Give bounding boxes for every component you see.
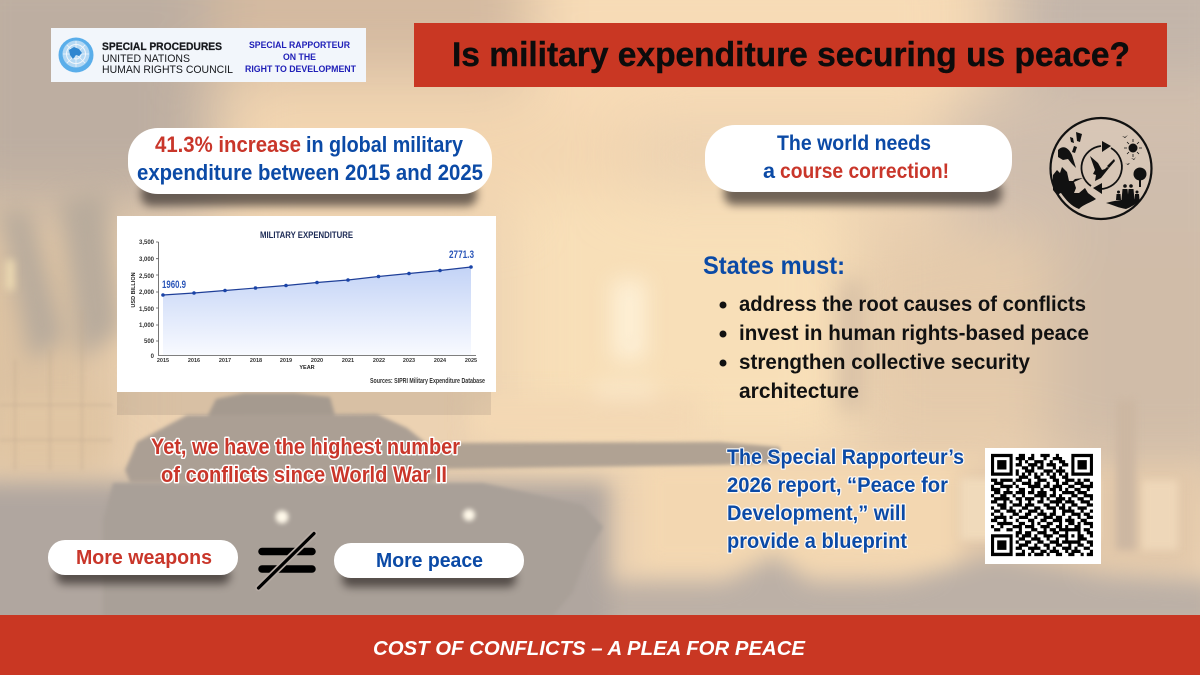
logo text: Special Procedures: HUMAN RIGHTS COUNCIL: [102, 64, 233, 76]
y-axis title: USD BILLION: [131, 272, 137, 308]
text block: 2026 report: [727, 446, 964, 553]
x-axis labels: 2024: [434, 358, 447, 364]
y-axis labels: 3,000: [139, 257, 155, 263]
callout: 41.3% increase: [128, 128, 492, 206]
x-axis labels: 2023: [403, 358, 415, 364]
footer banner: [0, 615, 1200, 675]
x-axis title: YEAR: [299, 365, 315, 371]
list: state actions: address the root causes of conflicts: [739, 293, 1086, 316]
callout: course correction: a: [763, 160, 775, 183]
logo text: Special Rapporteur: [245, 40, 356, 74]
callout: course correction: The world needs: [777, 132, 931, 155]
callout: 41.3% increase: 41.3% increase: [155, 132, 301, 157]
text block: 2026 report: Development,” will: [727, 502, 906, 525]
x-axis labels: 2017: [219, 358, 231, 364]
chart axes: [156, 242, 476, 356]
x-axis labels: 2018: [250, 358, 262, 364]
bombs, smoke, ruins and tank: [1053, 132, 1096, 209]
callout: 41.3% increase: in global military: [306, 132, 464, 157]
x-axis labels: [157, 358, 477, 364]
logo text: Special Procedures: SPECIAL PROCEDURES: [102, 41, 222, 53]
x-axis labels: 2016: [188, 358, 200, 364]
title banner: Is military expenditure securing us peace?: [452, 36, 1130, 74]
chart area fill: [163, 267, 471, 355]
pill: more weapons: [48, 540, 238, 584]
icon: UN emblem: [58, 38, 94, 72]
dove: [1090, 156, 1115, 181]
header logo panel: [51, 28, 366, 82]
QR code: [985, 448, 1101, 564]
statement: highest number of conflicts: [151, 434, 460, 487]
list: state actions: [720, 293, 1089, 403]
value label 2771.3: 2771.3: [449, 249, 474, 261]
value label 1960.9: 1960.9: [162, 279, 186, 291]
x-axis labels: 2022: [373, 358, 385, 364]
y-axis labels: 3,500: [139, 240, 155, 246]
list: state actions: invest in human rights-based peace: [739, 322, 1089, 345]
x-axis labels: 2025: [465, 358, 477, 364]
y-axis labels: 500: [144, 339, 155, 345]
y-axis labels: 2,500: [139, 274, 155, 280]
callout: course correction: course correction!: [780, 160, 949, 183]
line chart: military expenditure: MILITARY EXPENDITURE: [260, 230, 353, 240]
y-axis labels: 1,500: [139, 307, 155, 313]
icon: not equal sign: [258, 534, 314, 588]
y-axis labels: 1,000: [139, 323, 155, 329]
statement: highest number of conflicts: of conflicts since World War II: [161, 462, 447, 487]
callout: 41.3% increase: expenditure between 2015 and 2025: [137, 160, 483, 185]
list: state actions: architecture: [739, 380, 859, 403]
x-axis labels: 2015: [157, 358, 169, 364]
logo text: Special Procedures: UNITED NATIONS: [102, 53, 190, 65]
wire grid on the left: [0, 310, 112, 470]
icon: war to peace circular emblem: [1050, 118, 1152, 219]
cycle arrows: [1081, 141, 1122, 194]
pill: more peace: [334, 543, 524, 587]
text block: 2026 report: The Special Rapporteur’s: [727, 446, 964, 469]
logo text: Special Rapporteur: SPECIAL RAPPORTEUR: [249, 40, 350, 50]
heading: states must: States must:: [703, 252, 845, 280]
x-axis labels: 2021: [342, 358, 354, 364]
data line with markers: [161, 265, 473, 297]
statement: highest number of conflicts: Yet, we have the highest number: [151, 434, 460, 459]
line chart: military expenditure: [117, 216, 496, 392]
y-axis labels: 0: [151, 354, 155, 360]
text block: 2026 report: 2026 report, “Peace for: [727, 474, 948, 497]
footer banner: COST OF CONFLICTS – A PLEA FOR PEACE: [373, 638, 806, 660]
text block: 2026 report: provide a blueprint: [727, 530, 907, 553]
logo text: Special Rapporteur: ON THE: [283, 52, 316, 62]
pill: more weapons: More weapons: [76, 547, 212, 569]
sun, birds, tree and family: [1106, 135, 1146, 209]
y-axis labels: 2,000: [139, 290, 155, 296]
list: state actions: strengthen collective security: [739, 351, 1030, 374]
chart source: Sources: SIPRI Military Expenditure Database: [370, 376, 485, 385]
x-axis labels: 2020: [311, 358, 323, 364]
logo text: Special Rapporteur: RIGHT TO DEVELOPMENT: [245, 64, 356, 74]
logo text: Special Procedures: [102, 41, 233, 76]
pill: more peace: More peace: [376, 550, 483, 572]
y-axis labels: [139, 240, 155, 360]
title banner: [414, 23, 1167, 87]
x-axis labels: 2019: [280, 358, 292, 364]
callout: course correction: [705, 125, 1012, 205]
